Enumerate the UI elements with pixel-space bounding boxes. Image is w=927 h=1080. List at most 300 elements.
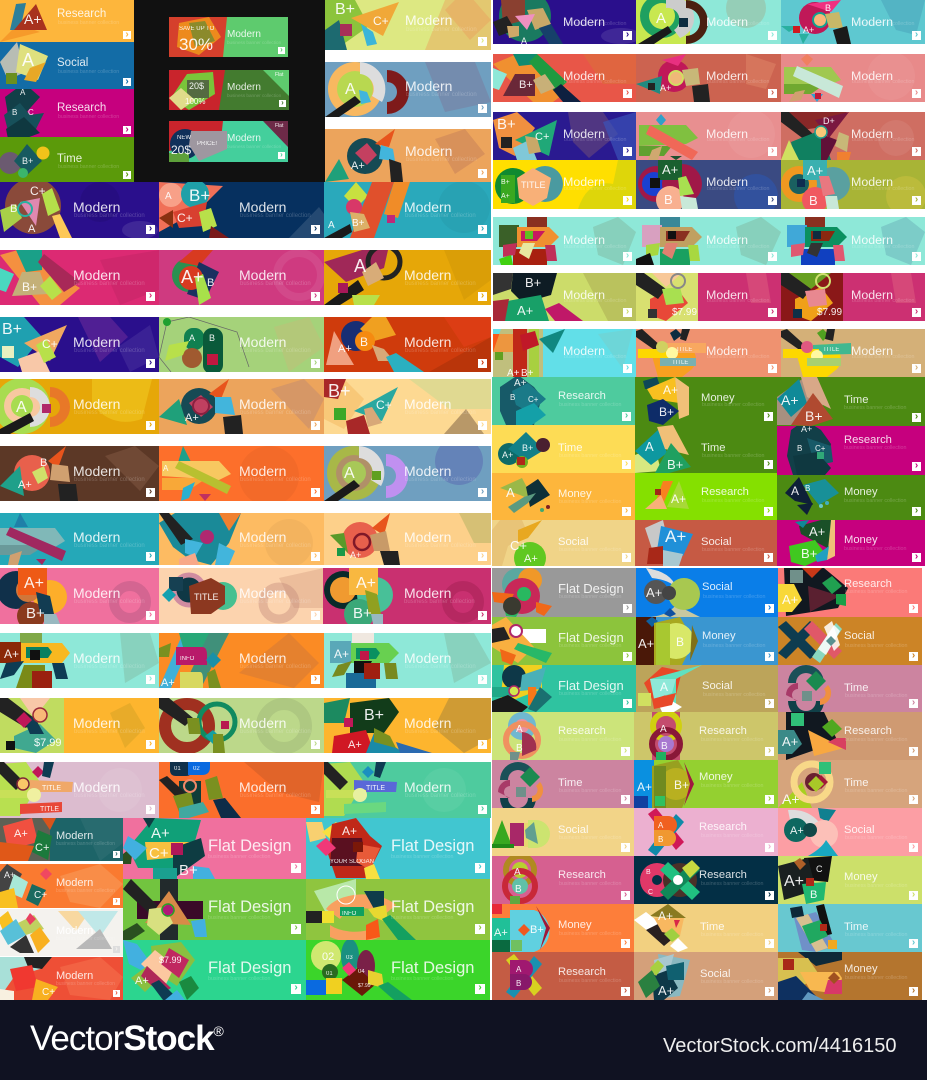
banner: Modern indigo hand: B [10,203,17,215]
banner: Modern amber: Modern [404,267,451,283]
banner: Flat Design olive: Flat Design [391,898,474,916]
banner: Modern brown [0,446,159,501]
banner: Time clay ring: A+ [782,791,800,807]
banner: Flat Design turquoise: › [478,861,482,872]
banner: Money blue: business banner collection [703,643,765,649]
banner: right Modern pink 7.99: business banner collection [707,298,769,304]
banner: Money amber: business banner collection [559,499,621,505]
banner: right Modern aqua tan [636,217,781,265]
banner: right Modern slate navy: › [771,194,774,205]
banner: Modern orange slogan [159,446,324,501]
footer bar [0,1000,927,1080]
banner: Research mint: business banner collection [559,402,621,408]
banner: Social blue: › [125,76,129,87]
banner: Modern teal: business banner collection [405,213,476,219]
banner: Modern navy: B+ [189,186,210,205]
banner: right Modern aqua tan: business banner collection [707,244,769,250]
banner: right Modern tan titles: business banner collection [852,354,914,360]
banner: Flat Design leaf: Flat Design [558,630,624,645]
banner: Modern brown: Modern [73,463,120,479]
banner: right Modern rust hands: › [915,145,918,156]
banner: Research tan arrow: business banner collection [845,737,907,743]
banner: Modern pink A+ B+ [0,568,159,624]
banner: Modern orange info [159,633,324,688]
banner: Time olive: B+ [667,457,683,472]
banner: Modern lilac titles: › [149,803,152,814]
banner: Money amber: Money [558,488,592,500]
banner: right Modern aqua ring: Modern [706,15,748,29]
banner: right Modern aqua ring [636,0,781,44]
banner: right Modern rose 7.99 [781,273,925,321]
banner: Modern orange slogan: Modern [239,463,286,479]
banner: Modern sand: A+ [185,412,199,424]
banner: Modern lime: Modern [405,12,452,28]
banner: Modern gold dark B+: B+ [364,707,384,724]
banner: Research midnight: › [768,889,771,900]
banner: Money green: B+ [674,778,689,792]
banner: Time olive: business banner collection [702,453,764,459]
banner: Modern vermilion: › [481,357,484,368]
banner: right Modern rust hands [781,112,925,160]
banner: Research pink cross: › [768,841,771,852]
banner: Modern yellow 7.99: › [149,738,152,749]
banner: Time olive [635,425,777,473]
banner: right Modern tan titles: › [915,362,918,373]
banner: right Modern indigo hand [493,0,636,44]
banner: Time clay ring: business banner collection [845,788,907,794]
banner: Modern amber ring: A [16,399,27,416]
banner: right Modern yellow title [493,160,636,209]
banner: Time olive: A [645,439,654,454]
banner: Modern amber ring [0,379,159,434]
banner: new price: business banner collection [227,144,281,149]
banner: right Modern indigo hand: Modern [563,15,605,29]
banner: Modern teal slogan: Modern [73,529,120,545]
banner: Time olive triangles: B+ [805,408,823,424]
banner: right Modern sky: Modern [563,344,605,358]
banner: Modern aqua hands red: › [149,673,152,684]
banner: right Modern indigo squares: B+ [497,116,516,133]
banner: Modern aqua hands olive: Modern [404,650,451,666]
banner: 20 dollar premium: Modern [227,82,261,93]
banner: right Modern pink 7.99: › [771,306,774,317]
banner: Social butter [492,808,634,856]
banner: right Modern lime dark [493,273,636,321]
banner: Time wheat diamond: business banner collection [701,932,763,938]
banner: new price [169,121,288,162]
banner: Research khaki ring: Research [699,725,747,737]
banner: Modern orange info: › [314,673,317,684]
banner: Money blue: B [676,635,684,649]
banner: small Modern red [0,957,123,1000]
banner: right Modern salmon slogan: Modern [706,127,748,141]
banner: Modern yellow 7.99: Modern [73,715,120,731]
banner: Time yellow: › [625,458,628,469]
banner: Modern amber ring: Modern [73,396,120,412]
banner: Flat Design turquoise: A+ [342,824,357,838]
banner: right Modern aqua green [493,217,636,265]
banner: Modern sage network [159,317,324,372]
banner: Research salmon red: › [912,602,915,613]
banner: Social ochre cross [778,617,922,665]
banner: Modern lime [325,0,491,50]
banner: Modern peach title hexagon: Modern [239,585,286,601]
banner: Modern sand orange: business banner collection [406,157,477,163]
banner: right Modern terracotta: business banner collection [707,79,769,85]
banner: Time mauve [778,665,922,712]
banner: right Modern indigo hand: business banner collection [564,21,626,27]
banner: Research magenta [0,89,134,137]
banner: Social sand: A+ [524,553,538,565]
banner: right Modern olive yellow: A+ [807,163,823,178]
banner: right Modern aqua green: Modern [563,233,605,247]
banner: small Modern white: Modern [56,925,93,937]
banner: Modern peach title hexagon: › [314,609,317,620]
banner: Flat Design olive [306,879,490,940]
banner: Money olive: › [767,410,770,421]
banner: small Modern orange: A+ [4,870,15,880]
banner: Social blue [0,42,134,89]
banner: Modern steel blue: business banner collection [406,92,477,98]
banner: Modern wheat: Modern [404,529,451,545]
banner: Research salmon red: Research [844,578,892,590]
banner: Flat Design leaf: › [626,650,629,661]
banner: right Modern blush: business banner collection [852,79,914,85]
banner: Social khaki [636,665,778,712]
banner: Modern yellow 7.99: business banner collection [74,729,145,735]
banner: Modern pale green: › [314,738,317,749]
banner: Time yellow: business banner collection [559,453,621,459]
banner: Money olive arrows [777,475,925,520]
banner: Social azure: A+ [646,585,662,600]
banner: right Modern sky: › [626,362,629,373]
banner: Money olive: A+ [663,383,678,397]
banner: Money lime dark squares: Money [844,871,878,883]
banner: Modern teal: Modern [404,199,451,215]
banner: Modern peach star: › [314,550,317,561]
banner: Modern indigo triangle: C+ [42,337,58,351]
banner: right Modern blush [781,54,925,102]
banner: Research mint: › [625,410,628,421]
banner: Time green: business banner collection [58,164,119,170]
banner: Time wheat diamond [634,904,778,952]
banner: Flat Design teal: Flat Design [558,678,624,693]
banner: Modern lime: business banner collection [406,27,477,33]
banner: Modern navy: C+ [177,211,193,225]
banner: Research brick [492,952,634,1000]
banner: Modern pink: › [314,290,317,301]
banner: Modern tangerine: 02 [193,766,200,772]
banner: Money lime dark squares: B [810,889,817,901]
banner: Research midnight: business banner collection [701,881,763,887]
banner: right Modern slate navy: A+ [662,162,678,177]
banner: Modern crimson: B+ [22,280,37,294]
banner: Research khaki ring: business banner collection [701,737,763,743]
banner: Research lime [635,473,777,520]
banner: Modern pink A+ B+: › [149,609,152,620]
banner: Money magenta [777,520,925,566]
banner: Money copper: Money [844,963,878,975]
banner: right Modern salmon titles: TITLE [672,360,688,366]
banner: Flat Design lime: › [478,982,482,993]
banner: Research lime: › [767,505,770,516]
banner: Money olive [635,377,777,425]
banner: Modern sand orange: › [481,167,484,178]
banner: Social blue: Social [57,57,88,69]
banner: sale 30 percent: 30% [179,35,213,54]
banner: Research pale lime [492,712,634,760]
banner: Social sand: › [625,551,628,562]
banner: Modern navy: business banner collection [240,213,311,219]
banner: Modern lilac titles: Modern [73,779,120,795]
banner: Time olive triangles: › [915,411,918,422]
banner: Research tan arrow [778,712,922,760]
banner: Flat Design lime: 02 [322,951,334,963]
banner: Modern mint titles: business banner collection [405,793,476,799]
banner: Modern pale green: Modern [239,715,286,731]
banner: right Modern yellow title: business banner collection [564,186,626,192]
banner: Modern vermilion: B [360,335,368,349]
banner: Modern lilac titles [0,762,159,818]
banner: right Modern rust hands: business banner collection [852,137,914,143]
banner: Research midnight: B [646,869,651,876]
banner: right Modern indigo squares: › [626,145,629,156]
banner: Research hot pink [492,856,634,904]
banner: Modern cream: business banner collection [405,410,476,416]
banner: Modern pink: business banner collection [240,281,311,287]
banner: Time wheat diamond: Time [700,921,724,933]
banner: Social sand: Social [558,536,588,548]
banner: right Modern rose 7.99: $7.99 [817,307,842,318]
banner: Modern navy [159,182,324,238]
banner: Flat Design sea green [123,940,306,1000]
banner: Research pale lime: › [624,745,627,756]
banner: Modern sand: business banner collection [240,410,311,416]
banner: right Modern terracotta: › [771,87,774,98]
banner: Money olive: business banner collection [702,402,764,408]
banner: Time mauve second [492,760,634,808]
banner: Flat Design leaf [492,617,636,665]
banner: Research tan arrow: › [912,745,915,756]
banner: Modern peach star: Modern [239,529,286,545]
banner: Time olive triangles: A+ [781,392,799,408]
banner: Modern teal slogan: business banner collection [74,543,145,549]
banner: 20 dollar premium: 100% [185,97,205,106]
banner: Modern lime: › [481,35,484,46]
banner: Research midnight [634,856,778,904]
banner: Modern rose A+ B+: › [481,609,484,620]
banner: right Modern coral: B+ [519,79,533,91]
banner: Research pale lime: Research [558,725,606,737]
banner: Research mint: B [510,393,515,402]
banner: Modern sand: Modern [239,396,286,412]
banner: Money copper: business banner collection [845,975,907,981]
banner: Money magenta: Money [844,534,878,546]
banner: right Modern indigo hand: › [626,29,629,40]
banner: Flat Design turquoise: YOUR SLOGAN [330,859,374,865]
banner: Time mauve second: business banner collection [559,788,621,794]
banner: right Modern slate navy: Modern [706,175,748,189]
banner: Time cyan [778,904,922,952]
banner: Modern indigo hand: business banner collection [74,213,145,219]
banner: Modern brown: › [149,486,152,497]
banner: Modern slate violet: › [481,486,484,497]
banner: Money magenta: A+ [809,524,825,539]
banner: Modern pink [159,250,324,305]
banner: Modern teal: › [481,223,484,234]
banner: Flat Design lime: business banner collection [391,976,453,982]
banner: Research brick: › [624,985,627,996]
banner: Research orange: business banner collection [58,20,119,26]
banner: Modern sand orange: Modern [405,143,452,159]
banner: right Modern indigo squares: business banner collection [564,137,626,143]
banner: Research lime: business banner collection [702,498,764,504]
banner: Flat Design lime: $7.99 [358,983,371,989]
banner: Time olive triangles [777,377,925,426]
banner: Modern crimson: business banner collection [74,281,145,287]
banner: Research tan arrow: A+ [782,734,798,749]
banner: Modern sand orange: A+ [351,160,365,172]
banner: Social azure: business banner collection [703,594,765,600]
banner: Social rose: A+ [790,825,804,837]
banner: Flat Design green: business banner collection [208,915,270,921]
banner: Modern cream [324,379,491,434]
banner: Modern steel blue [325,62,491,117]
banner: Money green: › [768,793,771,804]
banner: Modern teal slogan: › [149,550,152,561]
banner: Flat Design turquoise: Flat Design [391,837,474,855]
banner: Modern indigo triangle: › [149,357,152,368]
banner: Modern gold dark B+: Modern [404,715,451,731]
banner: Research magenta diamonds: C+ [815,444,826,453]
banner: Social clay: business banner collection [701,979,763,985]
banner: right Modern aqua green: business banner collection [564,244,626,250]
banner: Flat Design leaf: business banner collection [559,643,621,649]
banner: right Modern cyan magnifier: Modern [851,15,893,29]
banner: 20 dollar premium: Flat [275,72,284,78]
banner: small Modern dark teal: C+ [35,842,49,854]
banner: Research hot pink: B [515,884,522,895]
banner: Social blue: business banner collection [58,69,119,75]
banner: Modern tangerine: Modern [239,779,286,795]
banner: Modern pink A+ B+: A+ [24,575,44,592]
banner: sale 30 percent: › [280,45,283,54]
banner: right Modern tan titles: TITLE [823,347,839,353]
banner: Time green: B+ [22,156,33,166]
banner: Social clay [634,952,778,1000]
banner: Modern teal slogan [0,513,159,565]
banner: right Modern salmon titles: TITLE [676,347,692,353]
banner: Money blue: A+ [638,636,654,651]
banner: Modern pink: A+ [181,267,204,287]
banner: right Modern yellow title: B+ [501,179,510,186]
banner: Research hot pink: business banner collection [559,881,621,887]
banner: small Modern red: › [115,988,118,997]
banner: Social khaki: Social [702,680,732,692]
banner: sale 30 percent [169,17,288,57]
banner: Money magenta: business banner collection [844,546,906,552]
banner: right Modern salmon titles [636,329,781,377]
banner: small Modern orange [0,864,123,908]
banner: Time green: Time [57,153,82,165]
banner: Money lime dark squares: › [912,889,915,900]
banner: right Modern pink 7.99 [636,273,781,321]
banner: Time olive: › [767,458,770,469]
banner: Modern indigo triangle: business banner collection [74,348,145,354]
banner: Flat Design pink: C+ [149,845,169,862]
banner: right Modern aqua green: › [626,250,629,261]
banner: Modern aqua hands red: Modern [73,650,120,666]
banner: Modern wheat: › [481,550,484,561]
banner: Modern brown: business banner collection [74,477,145,483]
banner: small Modern orange: › [115,896,118,905]
banner: Research khaki ring: A [660,724,667,735]
banner: Social clay: A+ [658,983,674,998]
banner: right Modern lime dark: B+ [525,275,541,290]
banner: small Modern red: C+ [42,987,55,998]
banner: Modern slate violet: business banner collection [405,477,476,483]
banner: right Modern sky: business banner collection [564,354,626,360]
banner: Social khaki: › [768,697,771,708]
banner: right Modern slate navy: B [664,192,673,207]
banner: Social clay: Social [700,968,730,980]
banner: Modern vermilion: A+ [338,343,352,355]
banner: right Modern aqua ring: A [656,10,666,27]
banner: Flat Design olive: › [478,922,482,933]
banner: 20 dollar premium: business banner collection [227,93,281,98]
banner: Modern sand: › [314,419,317,430]
banner: Modern vermilion [324,317,491,372]
banner: Modern pink: Modern [239,267,286,283]
banner: small Modern red: business banner collection [56,981,115,987]
banner: Time mauve: › [912,697,915,708]
banner: Research salmon red [778,568,922,617]
banner: Modern rose A+ B+: business banner collection [404,599,475,605]
banner: right Modern aqua tan: Modern [706,233,748,247]
banner: Social azure [636,568,778,617]
banner: Modern sage network: A [189,333,195,343]
banner: small Modern white [0,909,123,956]
banner: new price: › [280,150,283,159]
banner: Modern orange slogan: A [163,464,169,473]
banner: Modern pink A+ B+: Modern [73,585,120,601]
banner: small Modern dark teal: › [115,849,118,858]
banner: 20 dollar premium: 20$ [189,81,204,91]
banner: Modern pale green [159,698,324,753]
banner: Modern sand [159,379,324,434]
banner: Research orange: › [125,29,129,40]
banner: Modern wheat: A+ [350,550,361,560]
banner: Modern slate violet [324,446,491,501]
banner: small Modern red: Modern [56,970,93,982]
banner: Flat Design lime [306,940,490,1000]
banner: Modern sage network: › [314,357,317,368]
banner: right Modern salmon titles: business banner collection [707,354,769,360]
banner: Flat Design turquoise: business banner collection [391,854,453,860]
banner: small Modern white: › [115,944,118,953]
banner: Social terracotta [635,520,777,566]
banner: Time yellow: A+ [502,450,513,460]
banner: right Modern pink 7.99: Modern [706,288,748,302]
banner: right Modern cyan magnifier [781,0,925,44]
banner: Modern aqua hands red: business banner collection [74,664,145,670]
banner: new price: Flat [275,123,284,129]
banner: Modern amber [324,250,491,305]
banner: Research pink cross: Research [699,821,747,833]
banner: right Modern yellow title: Modern [563,175,605,189]
banner: Modern teal [324,182,491,238]
banner: Social rose [778,808,922,856]
